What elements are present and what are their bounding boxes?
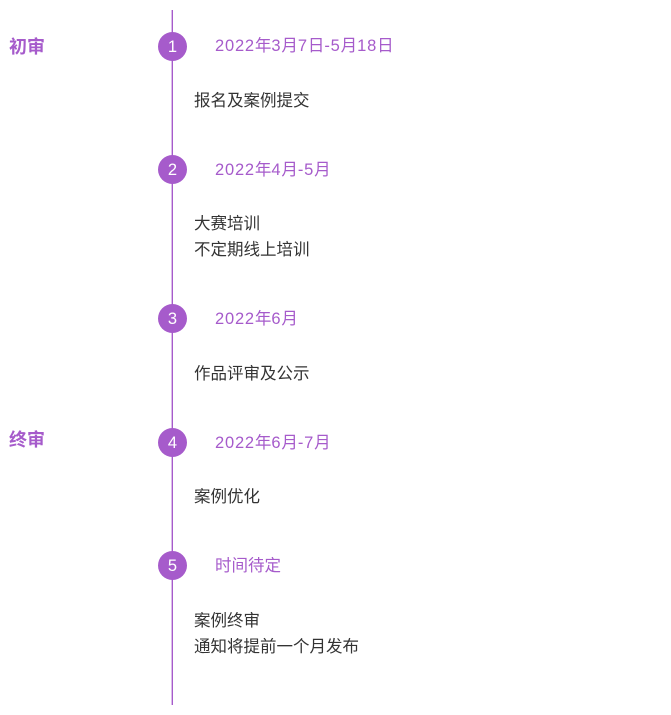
step 5 description: 通知将提前一个月发布 bbox=[194, 638, 359, 656]
step 2 marker bbox=[158, 155, 187, 184]
step 5 date: 时间待定 bbox=[215, 557, 281, 575]
step 5 description bbox=[194, 612, 359, 656]
step 1 marker bbox=[158, 32, 187, 61]
step 3 date: 2022年6月 bbox=[215, 310, 298, 328]
step 2 marker: 2 bbox=[168, 161, 177, 179]
stage label: first round: 初审 bbox=[9, 37, 45, 57]
step 3 marker: 3 bbox=[168, 310, 177, 328]
step 2 date: 2022年4月-5月 bbox=[215, 161, 331, 179]
step 3 description: 作品评审及公示 bbox=[194, 365, 310, 383]
step 5 marker: 5 bbox=[168, 557, 177, 575]
step 3 marker bbox=[158, 304, 187, 333]
step 2 description: 大赛培训 bbox=[194, 215, 260, 233]
step 2 description bbox=[194, 214, 310, 259]
step 4 marker bbox=[158, 428, 187, 457]
step 4 description: 案例优化 bbox=[194, 488, 260, 506]
step 1 marker: 1 bbox=[168, 38, 177, 56]
step 5 description: 案例终审 bbox=[194, 612, 260, 630]
stage label: final round: 终审 bbox=[9, 430, 45, 450]
step 2 description: 不定期线上培训 bbox=[194, 241, 310, 259]
step 1 description: 报名及案例提交 bbox=[194, 92, 310, 110]
step 1 date: 2022年3月7日-5月18日 bbox=[215, 37, 394, 55]
step 4 marker: 4 bbox=[168, 434, 177, 452]
step 4 date: 2022年6月-7月 bbox=[215, 434, 331, 452]
step 5 marker bbox=[158, 551, 187, 580]
